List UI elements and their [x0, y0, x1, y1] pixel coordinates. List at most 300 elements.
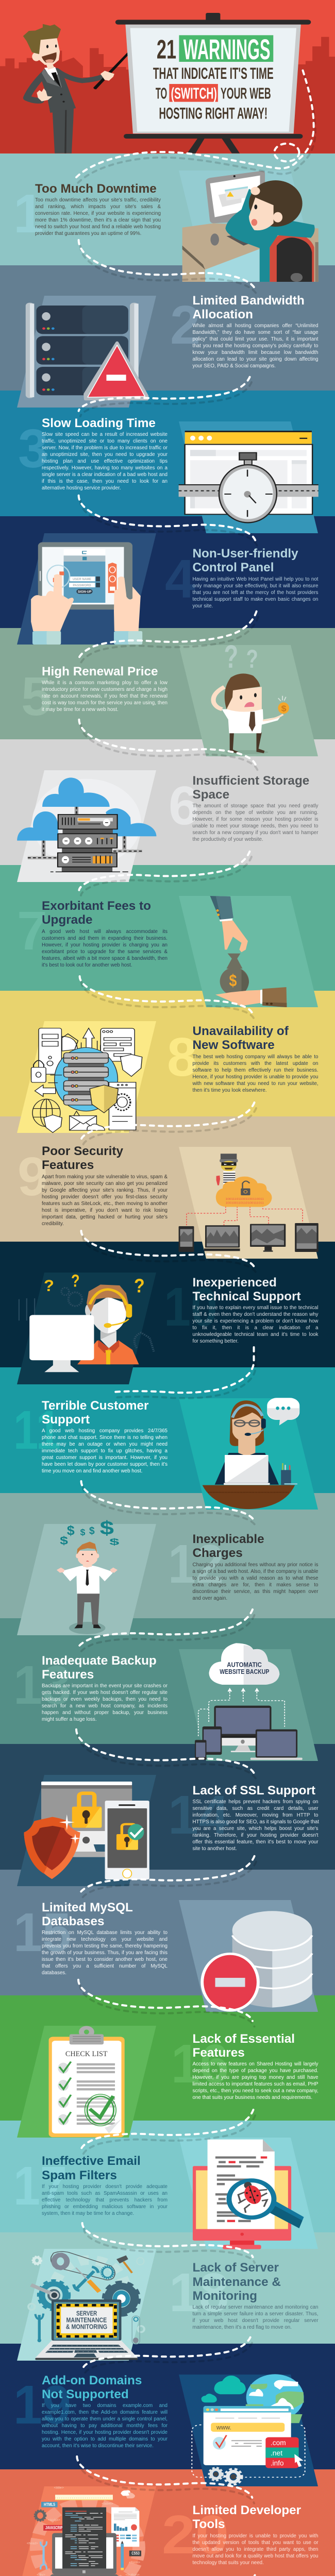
- icon: thief with cloud and hacked devices: 100111011001100110011: [225, 1198, 264, 1201]
- text: section 6 insufficient storage space: [193, 774, 319, 842]
- icon: globe, browser and domain extension menu: [192, 2374, 305, 2485]
- text: section 16 lack of essential features: one that suits your business needs and requirements.: [193, 2095, 312, 2100]
- header illustration: skyline, presenter and projection screen: [0, 13, 335, 154]
- text: section 5 high renewal price: High Renewal Price: [42, 665, 158, 679]
- text: section 18 lack of server maintenance and monitoring: Maintenance &: [193, 2275, 281, 2289]
- text: section 11 terrible customer support: Support: [42, 1413, 90, 1427]
- title: [153, 33, 274, 123]
- text: section 17 ineffective email spam filters: anti-spam tools such as SpamAssassin or uses an: [42, 2191, 167, 2196]
- text: section 1 too much downtime: [35, 182, 161, 236]
- icon: developer laptop with code, tools and tags: HTML5: [44, 2502, 55, 2507]
- text: section 7 exorbitant fees to upgrade: A good web host will always accommodate its: [42, 929, 167, 935]
- text: section 11 terrible customer support: [42, 1399, 167, 1474]
- section 11 number and panel: [13, 1398, 318, 1510]
- band 18 background: [0, 2232, 335, 2344]
- band 9 background: [0, 1116, 335, 1242]
- text: section 5 high renewal price: rate on account renewals, if you feel that the renewal: [42, 693, 167, 699]
- text: section 19 add-on domains not supported: you with the option to add multiple domains to your: [42, 2436, 167, 2442]
- section 18 number and panel: [17, 2249, 229, 2361]
- text: section 20 limited developer tools: the updated version of tools that you want to use or: [193, 2540, 319, 2546]
- text: section 20 limited developer tools: If your hosting provider is unable to provide you with: [193, 2533, 319, 2539]
- text: section 15 limited MySQL databases: [42, 1901, 167, 1976]
- text: section 6 insufficient storage space: Insufficient Storage: [193, 774, 309, 788]
- text: section 15 limited MySQL databases: the growth of your business. Thus, if you are facing this: [42, 1950, 167, 1956]
- text: section 8 unavailability of new software: The best web hosting company will always be able to: [193, 1054, 319, 1060]
- section 17 number and panel: 17: [13, 2156, 67, 2216]
- text: section 1 too much downtime: Too much downtime affects your site's traffic, credibility: [35, 197, 161, 203]
- text: section 19 add-on domains not supported: If you have two domains example.com and: [42, 2403, 167, 2409]
- text: section 16 lack of essential features: scripts, etc., then you need to seek out a new company,: [193, 2088, 319, 2094]
- text: section 8 unavailability of new software: Unavailability of: [193, 1024, 289, 1038]
- icon: thief with cloud and hacked devices: 100100110110100111011: [225, 1202, 264, 1205]
- text: section 12 inexplicable charges: to provide you with a valid reason as to what these: [193, 1575, 319, 1581]
- text: section 6 insufficient storage space: depends on the type of website you are running.: [193, 810, 319, 816]
- text: section 2 limited bandwidth allocation: Limited Bandwidth: [193, 294, 305, 308]
- section 8 number and panel: [17, 1021, 197, 1133]
- icon: developer laptop with code, tools and tags: <head>: [27, 2542, 38, 2545]
- icon: secure server with shields, padlock and globe: [31, 1028, 142, 1132]
- band 1 background: [0, 154, 335, 265]
- band 15 background: [0, 1870, 335, 1995]
- text: section 8 unavailability of new software: [193, 1024, 319, 1093]
- section 19 number and panel: 19: [13, 2375, 71, 2435]
- text: section 3 slow loading time: if this is the case, then you need to look for an: [42, 479, 167, 484]
- text: section 14 lack of SSL support: offer this essential feature, then it's best to move your: [193, 1839, 319, 1845]
- text: section 1 too much downtime: provider that guarantees you an uptime of 99%.: [35, 231, 141, 236]
- text: section 13 inadequate backup features: might suffer a huge loss.: [42, 1717, 97, 1722]
- text: section 13 inadequate backup features: Backups are important in the event your site crashes or: [42, 1683, 167, 1689]
- text: section 14 lack of SSL support: information, etc. Moreover, moving from HTTP to: [193, 1812, 319, 1818]
- section 9 number and panel: [18, 1146, 318, 1259]
- text: section 17 ineffective email spam filters: effective technology that prevents hackers from: [42, 2197, 167, 2203]
- text: section 5 high renewal price: introductory price for new customers and charge a high: [42, 687, 167, 692]
- arrow: dashed route from section 4 to section 5: [79, 612, 258, 771]
- text: section 18 lack of server maintenance and monitoring: [193, 2261, 319, 2330]
- text: section 15 limited MySQL databases: Databases: [42, 1914, 105, 1928]
- text: section 9 poor security features: Features: [42, 1158, 94, 1172]
- icon: woman customer support agent at laptop: [203, 1398, 299, 1509]
- text: section 20 limited developer tools: Tools: [193, 2517, 225, 2531]
- text: section 10 inexperienced technical support: to fix it, then it is a clear indication of a: [193, 1325, 319, 1331]
- section 11 number and panel: 11: [13, 1400, 61, 1461]
- arrow: dashed route from section 16 to section 17: [81, 2110, 255, 2263]
- title: TO: [156, 84, 167, 103]
- text: section 13 inadequate backup features: happen and without proper backup, your business: [42, 1710, 167, 1716]
- section 14 number and panel: [17, 1775, 229, 1886]
- text: section 17 ineffective email spam filters: If your hosting provider doesn't provide adequate: [42, 2184, 167, 2190]
- text: section 17 ineffective email spam filters: system, then it may be time for a change.: [42, 2211, 134, 2216]
- text: section 9 poor security features: malware, poor site security can also get you penalized: [42, 1181, 167, 1187]
- section 20 number and panel: 20: [162, 2504, 229, 2565]
- presenter: [23, 24, 147, 154]
- icon: confused man with coin: ?: [224, 638, 238, 675]
- text: section 7 exorbitant fees to upgrade: Upgrade: [42, 913, 93, 927]
- icon: hand dropping money bag into hand: [210, 896, 287, 1007]
- section 12 number and panel: [17, 1524, 224, 1635]
- text: section 2 limited bandwidth allocation: [193, 294, 319, 369]
- icon: browser with stopwatch: [179, 431, 319, 523]
- text: section 11 terrible customer support: immediate tech support to fix up glitches, having a: [42, 1448, 167, 1454]
- icon: gears, tools and server maintenance laptop: MAINTENANCE: [66, 2317, 107, 2324]
- text: section 3 slow loading time: [42, 416, 167, 491]
- band 5 background: [0, 628, 335, 739]
- text: section 10 inexperienced technical support: for something better.: [193, 1338, 239, 1344]
- text: section 4 non-user-friendly control panel: Non-User-friendly: [193, 547, 298, 561]
- text: section 9 poor security features: credibility.: [42, 1221, 64, 1227]
- text: section 10 inexperienced technical support: Technical Support: [193, 1290, 301, 1303]
- icon: globe, browser and domain extension menu: www.: [216, 2424, 231, 2431]
- icon: gears, tools and server maintenance laptop: SERVER: [76, 2310, 97, 2317]
- section 7 number and panel: 7: [17, 901, 47, 961]
- text: section 20 limited developer tools: move out and look for a quality web host that offers you: [193, 2553, 319, 2559]
- text: section 3 slow loading time: traffic, unoptimized site or too many clients on one: [42, 438, 167, 444]
- section 2 number and panel: [17, 295, 200, 408]
- section 5 number and panel: [21, 645, 318, 756]
- text: section 6 insufficient storage space: However, if for some reason your hosting provider is: [193, 817, 319, 822]
- text: section 4 non-user-friendly control panel: Control Panel: [193, 561, 274, 574]
- band 19 background: [0, 2344, 335, 2469]
- text: section 4 non-user-friendly control panel: [193, 547, 319, 609]
- text: section 10 inexperienced technical support: [193, 1276, 319, 1344]
- icon: shrugging man with dollar signs: $: [60, 1535, 68, 1547]
- icon: developer laptop with code, tools and tags: <script>: [48, 2519, 60, 2522]
- section 17 number and panel: [13, 2138, 318, 2249]
- text: section 9 poor security features: host is imperative, if you don't want to risk losing: [42, 1208, 167, 1213]
- text: section 3 slow loading time: hosting plan and use effective optimization tips: [42, 459, 167, 464]
- text: section 9 poor security features: hosting provider doesn't offer you first-class security: [42, 1194, 167, 1200]
- text: section 12 inexplicable charges: and over again.: [193, 1596, 227, 1601]
- text: section 8 unavailability of new software: software to help them effectively run their business.: [193, 1067, 319, 1073]
- text: section 19 add-on domains not supported: Not Supported: [42, 2387, 129, 2401]
- arrow: dashed route from section 14 to section 15: [78, 1856, 256, 2027]
- text: section 6 insufficient storage space: Space: [193, 788, 229, 802]
- text: section 17 ineffective email spam filters: Ineffective Email: [42, 2154, 141, 2168]
- icon: server rack with warning triangle: [26, 303, 147, 399]
- text: section 5 high renewal price: While it is a common marketing ploy to offer a low: [42, 680, 167, 686]
- arrow: dashed route from section 8 to section 9: [81, 1103, 256, 1273]
- text: section 2 limited bandwidth allocation: your SEO, PAID & Social campaigns.: [193, 363, 276, 369]
- icon: check list clipboard: [49, 2026, 125, 2137]
- text: section 12 inexplicable charges: discontinue their service, as this might happen over: [193, 1589, 319, 1595]
- text: section 7 exorbitant fees to upgrade: it's best to look out for another web host.: [42, 962, 132, 968]
- text: section 11 terrible customer support: A good web hosting company provides 24/7/365: [42, 1428, 167, 1434]
- text: section 2 limited bandwidth allocation: allocation can lead to your site going down affecting: [193, 357, 319, 362]
- text: section 5 high renewal price: [42, 665, 167, 713]
- section 12 number and panel: 12: [168, 1534, 224, 1595]
- text: section 4 non-user-friendly control panel: Having an intuitive Web Host Panel will help you to not: [193, 577, 319, 582]
- icon: globe, browser and domain extension menu: .com: [271, 2439, 286, 2447]
- text: section 14 lack of SSL support: site to another host.: [193, 1846, 237, 1852]
- skyline: [0, 37, 335, 154]
- arrow: dashed route from section 2 to section 3: [79, 377, 257, 546]
- text: section 13 inadequate backup features: backups or even weekly backups, then you need to: [42, 1697, 167, 1702]
- text: section 8 unavailability of new software: provide its customers with the latest update on: [193, 1061, 319, 1066]
- section 16 number and panel: [17, 2026, 229, 2138]
- icon: shrugging man with dollar signs: $: [109, 1537, 119, 1547]
- arrow: dashed route from section 6 to section 7: [79, 852, 254, 1019]
- text: section 3 slow loading time: Slow site speed can be a result of increased website: [42, 432, 167, 437]
- text: section 15 limited MySQL databases: integrate new technology on your website and: [42, 1937, 167, 1942]
- text: section 14 lack of SSL support: sensitive data, such as credit card details, user: [193, 1806, 319, 1811]
- icon: shrugging man with dollar signs: [57, 1517, 119, 1634]
- text: section 4 non-user-friendly control panel: that you are not left at the mercy of the host providers: [193, 590, 319, 596]
- text: section 17 ineffective email spam filters: Spam Filters: [42, 2168, 117, 2182]
- text: section 10 inexperienced technical support: If you have to explain every small issue to the technical: [193, 1305, 319, 1311]
- text: section 6 insufficient storage space: The amount of storage space that you need greatly: [193, 803, 319, 809]
- text: section 6 insufficient storage space: the productivity of your website.: [193, 837, 263, 842]
- text: section 11 terrible customer support: Terrible Customer: [42, 1399, 148, 1413]
- text: section 7 exorbitant fees to upgrade: Exorbitant Fees to: [42, 899, 151, 913]
- icon: hand dropping money bag into hand: $: [229, 971, 237, 990]
- section 4 number and panel: [17, 533, 195, 645]
- text: section 2 limited bandwidth allocation: Bandwidth,” they do have some sort of “fair usage: [193, 330, 319, 335]
- band 8 background: [0, 991, 335, 1116]
- projection screen: [115, 13, 311, 154]
- text: section 13 inadequate backup features: [42, 1654, 167, 1722]
- text: section 16 lack of essential features: Access to new features on Shared Hosting will largely: [193, 2061, 319, 2067]
- text: section 15 limited MySQL databases: that offers you a sufficient number of MySQL: [42, 1963, 167, 1969]
- text: section 20 limited developer tools: [193, 2503, 319, 2566]
- text: section 9 poor security features: features such as SiteLock, etc., then moving to another: [42, 1201, 167, 1207]
- icon: developer laptop with code, tools and tags: JAVASCRIPT: [45, 2526, 65, 2530]
- icon: developer laptop with code, tools and tags: <form>: [129, 2561, 140, 2564]
- text: section 11 terrible customer support: phone and chat support. Since there is no telling when: [42, 1435, 167, 1440]
- icon: confused man with coin: ?: [246, 645, 258, 673]
- text: section 18 lack of server maintenance and monitoring: Lack of Server: [193, 2261, 279, 2275]
- icon: frustrated man at computer: [182, 171, 319, 282]
- band 20 background: [0, 2469, 335, 2576]
- icon: thief with cloud and hacked devices: [179, 1154, 319, 1252]
- text: section 9 poor security features: Apart from making your site vulnerable to virus, spam &: [42, 1174, 167, 1180]
- header illustration: skyline, presenter and projection screen: YOUR WEB: [221, 84, 271, 103]
- text: section 15 limited MySQL databases: issue then it's best to consider another web host, one: [42, 1957, 167, 1962]
- text: section 7 exorbitant fees to upgrade: exorbitant price to upgrade for the same services &: [42, 949, 167, 955]
- text: section 7 exorbitant fees to upgrade: customers and aid them in expanding their business.: [42, 936, 167, 941]
- text: section 12 inexplicable charges: [193, 1532, 319, 1601]
- band 17 background: [0, 2121, 335, 2232]
- section 13 number and panel: [13, 1649, 318, 1761]
- text: section 4 non-user-friendly control panel: only manage your site effectively, but it will also ensure: [193, 583, 319, 589]
- text: section 8 unavailability of new software: then it's time you look elsewhere.: [193, 1088, 267, 1093]
- text: section 15 limited MySQL databases: Limited MySQL: [42, 1901, 133, 1914]
- icon: database with stop sign: [200, 1911, 312, 2012]
- band 12 background: [0, 1493, 335, 1618]
- icon: clouds and server stack: [17, 777, 156, 872]
- section 3 number and panel: 3: [18, 418, 48, 479]
- login form: USER NAME: [73, 577, 91, 581]
- text: section 7 exorbitant fees to upgrade: However, if your hosting provider is charging you an: [42, 942, 167, 948]
- band 13 background: [0, 1618, 335, 1744]
- icon: gears, tools and server maintenance laptop: & MONITORING: [66, 2324, 107, 2331]
- section 6 number and panel: [17, 770, 199, 882]
- text: section 16 lack of essential features: [193, 2032, 319, 2100]
- text: section 18 lack of server maintenance and monitoring: if your web host doesn't provide regular server: [193, 2318, 319, 2324]
- text: section 6 insufficient storage space: unable to meet your storage needs, then you need to: [193, 823, 319, 829]
- section 9 number and panel: 9: [18, 1146, 48, 1207]
- section 14 number and panel: 14: [168, 1785, 229, 1845]
- icon: confused support agent behind monitor: ?: [44, 1277, 54, 1295]
- text: section 16 lack of essential features: Features: [193, 2046, 245, 2060]
- text: section 12 inexplicable charges: a sign of a bad web host. Also, if the company is unable: [193, 1569, 319, 1574]
- icon: confused man with coin: $: [281, 704, 287, 713]
- band 16 background: [0, 1995, 335, 2121]
- text: section 15 limited MySQL databases: Restriction on MySQL database limits your ability to: [42, 1930, 167, 1936]
- text: section 19 add-on domains not supported: without having to pay additional monthly fees for: [42, 2423, 167, 2429]
- text: section 11 terrible customer support: there may be an outage or when you might need: [42, 1442, 167, 1447]
- section 7 number and panel: [17, 896, 318, 1007]
- icon: confused support agent behind monitor: [19, 1271, 154, 1372]
- section 16 number and panel: 16: [171, 2033, 229, 2094]
- icon: hands holding login tablet: PASSWORD: [73, 583, 91, 587]
- text: section 2 limited bandwidth allocation: policy” that could limit your use. Thus, it is important: [193, 336, 319, 342]
- section 10 number and panel: 10: [164, 1277, 217, 1337]
- icon: developer laptop with code, tools and tags: <title>: [54, 2486, 64, 2489]
- text: section 17 ineffective email spam filters: [42, 2154, 167, 2216]
- section 6 number and panel: 6: [169, 775, 199, 836]
- text: section 15 limited MySQL databases: prevents you from testing the same, thereby hampering: [42, 1943, 167, 1949]
- icon: developer laptop with code, tools and tags: <label>: [102, 2502, 113, 2505]
- icon: shrugging man with dollar signs: $: [89, 1524, 95, 1536]
- icon: automatic website backup cloud with devices: WEBSITE BACKUP: [220, 1668, 269, 1676]
- icon: automatic website backup cloud with devices: AUTOMATIC: [227, 1661, 262, 1669]
- title: 21: [157, 35, 176, 64]
- arrow: dashed route from title to section 2: [76, 71, 315, 297]
- text: section 1 too much downtime: conversion rate. Hence, if your website is experiencing: [35, 211, 161, 216]
- section 8 number and panel: 8: [167, 1027, 197, 1088]
- text: section 7 exorbitant fees to upgrade: [42, 899, 167, 968]
- icon: shrugging man with dollar signs: $: [67, 1523, 75, 1538]
- text: section 16 lack of essential features: depend on the type of package you have purchased.: [193, 2068, 319, 2074]
- section 1 number and panel: 1: [13, 183, 44, 244]
- text: section 15 limited MySQL databases: databases.: [42, 1970, 66, 1976]
- text: section 20 limited developer tools: technology that suits your need.: [193, 2560, 264, 2566]
- text: section 4 non-user-friendly control panel: technical support staff to make even basic changes on: [193, 597, 319, 602]
- icon: confused man with coin: [213, 638, 289, 754]
- text: section 18 lack of server maintenance and monitoring: Monitoring: [193, 2289, 257, 2303]
- text: section 19 add-on domains not supported: allow you to operate them under a single control panel,: [42, 2416, 167, 2422]
- icon: hands holding login tablet: [31, 542, 142, 645]
- text: section 16 lack of essential features: However, if you are paying top money and still have: [193, 2075, 319, 2080]
- icon: globe, browser and domain extension menu: .info: [271, 2460, 284, 2467]
- text: section 3 slow loading time: an unoptimized site, then you need to upgrade your: [42, 452, 167, 457]
- text: section 11 terrible customer support: time you move on and find another web host.: [42, 1468, 143, 1474]
- text: section 13 inadequate backup features: gets hacked. If your web host doesn't offer regular site: [42, 1690, 167, 1696]
- text: section 19 add-on domains not supported: hosting. Hence, if your hosting provider doesn't provide: [42, 2430, 167, 2435]
- icon: check list clipboard: CHECK LIST: [65, 2049, 108, 2058]
- header background: [0, 0, 335, 154]
- icon: developer laptop with code, tools and tags: [27, 2486, 141, 2576]
- text: section 10 inexperienced technical support: your site is experiencing a problem or don't know how: [193, 1318, 319, 1324]
- text: section 14 lack of SSL support: Lack of SSL Support: [193, 1784, 315, 1798]
- band 11 background: [0, 1367, 335, 1493]
- section 4 number and panel: 4: [165, 549, 195, 609]
- icon: gears, tools and server maintenance laptop: [28, 2251, 144, 2360]
- section 20 number and panel: [17, 2486, 229, 2576]
- text: section 18 lack of server maintenance and monitoring: maintenance, then it's a red flag to move on.: [193, 2325, 292, 2330]
- band 6 background: [0, 739, 335, 865]
- text: section 12 inexplicable charges: extra charges are for, then it makes sense to: [193, 1582, 319, 1588]
- text: section 14 lack of SSL support: you are a secure site, which helps boost your site's: [193, 1826, 319, 1832]
- text: section 2 limited bandwidth allocation: that you read the hosting company's policy carefully to: [193, 343, 319, 349]
- text: section 9 poor security features: by Google affecting your site's ranking. Thus, if your: [42, 1188, 167, 1193]
- arrow: dashed route from section 10 to section 11: [81, 1347, 256, 1527]
- section 2 number and panel: 2: [170, 295, 200, 355]
- text: section 1 too much downtime: more than 1% downtime, then it's a clear sign that you: [35, 217, 161, 223]
- text: section 8 unavailability of new software: Hence, if your hosting provider is unable to provide you: [193, 1074, 319, 1080]
- text: section 7 exorbitant fees to upgrade: features, albeit with a bit more space & bandwidth, then: [42, 956, 167, 961]
- text: section 12 inexplicable charges: Inexplicable: [193, 1532, 264, 1546]
- text: section 18 lack of server maintenance and monitoring: turn a simple server failure into a server disaster. Thus,: [193, 2311, 319, 2317]
- text: section 11 terrible customer support: great customer support is important. However, if you: [42, 1455, 167, 1461]
- section 19 number and panel: [13, 2375, 318, 2486]
- icon: confused support agent behind monitor: ?: [134, 1275, 145, 1297]
- arrow: dashed route from section 12 to section 13: [76, 1609, 257, 1781]
- text: section 1 too much downtime: need to switch your host and find a reliable web hosting: [35, 224, 161, 230]
- text: section 14 lack of SSL support: [193, 1784, 320, 1852]
- text: section 19 add-on domains not supported: example1.com, then the Add-on domains feature will: [42, 2410, 167, 2415]
- text: section 13 inadequate backup features: Inadequate Backup: [42, 1654, 157, 1668]
- text: section 8 unavailability of new software: New Software: [193, 1038, 275, 1052]
- text: section 5 high renewal price: cost is way too much for the service you are using, then: [42, 700, 167, 706]
- section 15 number and panel: 15: [13, 1902, 71, 1963]
- band 3 background: [0, 391, 335, 516]
- text: section 19 add-on domains not supported: [42, 2374, 167, 2449]
- icon: developer laptop with code, tools and tags: CSS3: [131, 2551, 140, 2555]
- text: section 9 poor security features: [42, 1144, 167, 1227]
- section 18 number and panel: 18: [169, 2262, 229, 2323]
- text: section 16 lack of essential features: Lack of Essential: [193, 2032, 295, 2046]
- icon: automatic website backup cloud with devices: [195, 1643, 303, 1760]
- section 3 number and panel: [18, 418, 318, 533]
- text: section 6 insufficient storage space: search for a new company if you don't want to hamper: [193, 830, 319, 836]
- section 15 number and panel: [13, 1900, 318, 2012]
- text: section 12 inexplicable charges: Charging you additional fees without any prior notice is: [193, 1562, 319, 1568]
- icon: SSL padlocks, shield and phone: [24, 1782, 149, 1879]
- icon: email monitor with bug under magnifier: [193, 2140, 304, 2249]
- text: section 14 lack of SSL support: SSL certificate helps prevent hackers from spying on: [193, 1799, 319, 1805]
- band 4 background: [0, 516, 335, 628]
- text: section 4 non-user-friendly control panel: your site.: [193, 603, 213, 609]
- section 10 number and panel: [17, 1273, 217, 1384]
- text: section 18 lack of server maintenance and monitoring: Lack of regular server maintenance and monitoring can: [193, 2304, 319, 2310]
- text: section 20 limited developer tools: Limited Developer: [193, 2503, 301, 2517]
- section 13 number and panel: 13: [13, 1655, 71, 1716]
- text: section 3 slow loading time: alternative hosting service provider.: [42, 485, 121, 491]
- band 14 background: [0, 1744, 335, 1870]
- text: section 5 high renewal price: it may be time for a new web host.: [42, 707, 119, 713]
- text: section 9 poor security features: Poor Security: [42, 1144, 123, 1158]
- icon: hands holding login tablet: SIGN-UP: [78, 589, 91, 594]
- text: section 10 inexperienced technical support: staff & even then they don't understand the reason why: [193, 1312, 319, 1317]
- arrow: dashed route from section 18 to section 19: [77, 2337, 254, 2503]
- text: section 11 terrible customer support: have been let down by poor customer support, then it's: [42, 1462, 167, 1467]
- text: section 3 slow loading time: Slow Loading Time: [42, 416, 156, 430]
- text: section 12 inexplicable charges: Charges: [193, 1546, 243, 1560]
- text: section 2 limited bandwidth allocation: While almost all hosting companies offer “Unlimited: [193, 323, 319, 329]
- text: section 9 poor security features: important data, getting hacked or hurting your site's: [42, 1214, 167, 1220]
- text: section 8 unavailability of new software: with new software that you need to run your website,: [193, 1081, 319, 1087]
- icon: shrugging man with dollar signs: $: [100, 1517, 114, 1538]
- text: section 3 slow loading time: respectively. However, having too many websites on a: [42, 465, 167, 471]
- icon: confused support agent behind monitor: ?: [71, 1271, 80, 1291]
- icon: globe, browser and domain extension menu: .net: [271, 2449, 283, 2457]
- section 1 number and panel: [13, 171, 318, 282]
- text: section 16 lack of essential features: limited access to important features such as email, PHP: [193, 2081, 319, 2087]
- section 5 number and panel: 5: [21, 666, 52, 727]
- text: section 14 lack of SSL support: HTTPS is also good for SEO, as it signals to Google that: [193, 1819, 319, 1825]
- band 2 background: [0, 265, 335, 391]
- text: section 10 inexperienced technical support: unknowledgeable technical team and it's time to look: [193, 1332, 319, 1337]
